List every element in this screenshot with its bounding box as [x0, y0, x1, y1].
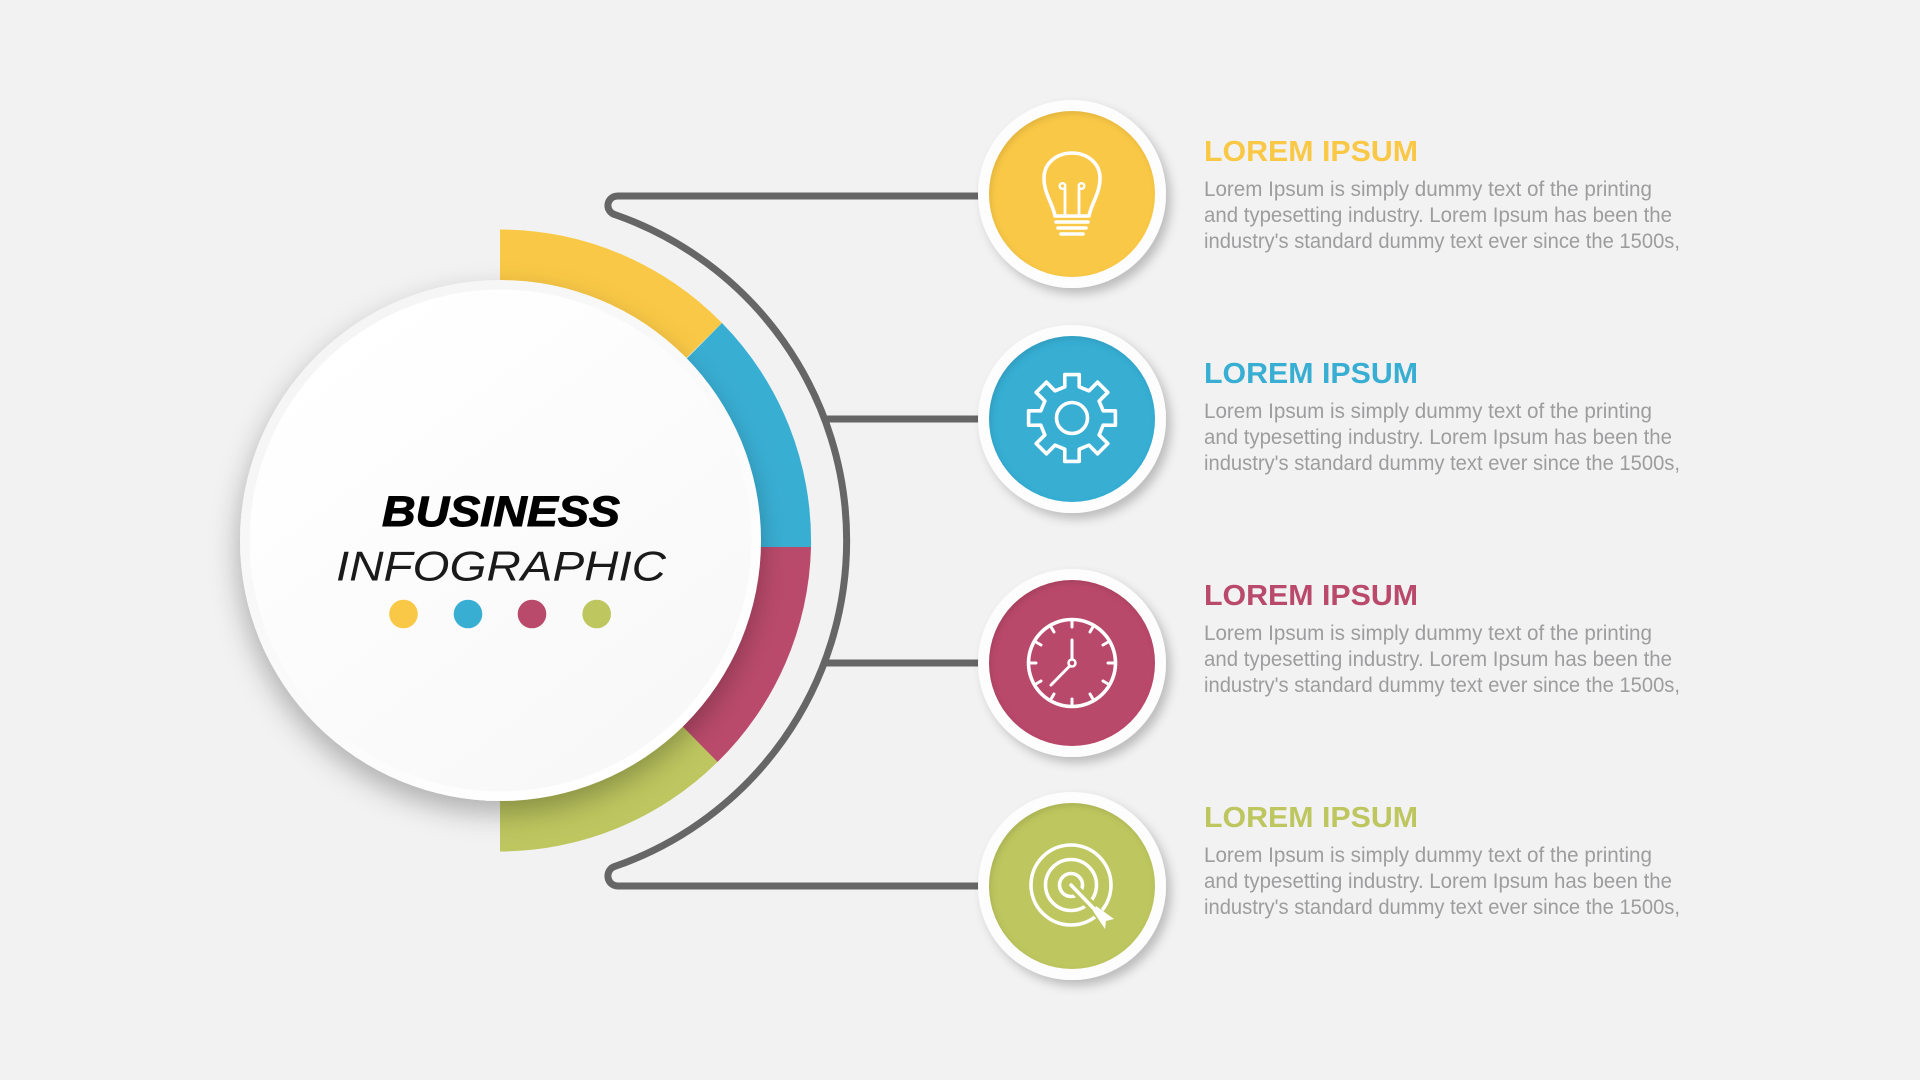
body text: and typesetting industry. Lorem Ipsum has been the	[1204, 204, 1672, 227]
colour dots	[389, 600, 611, 628]
icon: light bulb	[1044, 153, 1100, 234]
icon: gear	[1029, 375, 1115, 461]
node ring	[978, 325, 1166, 513]
body text: Lorem Ipsum is simply dummy text of the printing	[1204, 178, 1652, 201]
body text: industry's standard dummy text ever since the 1500s,	[1204, 896, 1680, 919]
body text: and typesetting industry. Lorem Ipsum has been the	[1204, 870, 1672, 893]
connector bracket lines	[608, 196, 985, 886]
title: infographic: INFOGRAPHIC	[336, 542, 667, 590]
body text: and typesetting industry. Lorem Ipsum has been the	[1204, 426, 1672, 449]
node fill	[989, 580, 1155, 746]
arc segment: yellow	[500, 230, 722, 540]
body text: industry's standard dummy text ever since the 1500s,	[1204, 452, 1680, 475]
body text: and typesetting industry. Lorem Ipsum has been the	[1204, 648, 1672, 671]
segmented colour arc	[500, 230, 811, 852]
body text	[1204, 622, 1680, 697]
step 1: yellow	[978, 100, 1680, 288]
node ring	[978, 792, 1166, 980]
node fill	[989, 336, 1155, 502]
arc segment: blue	[500, 323, 811, 547]
heading: LOREM IPSUM	[1204, 580, 1418, 612]
circle face	[250, 290, 752, 792]
body text	[1204, 178, 1680, 253]
body text: Lorem Ipsum is simply dummy text of the printing	[1204, 622, 1652, 645]
node fill	[989, 803, 1155, 969]
body text: industry's standard dummy text ever since the 1500s,	[1204, 230, 1680, 253]
heading: LOREM IPSUM	[1204, 358, 1418, 390]
step 2: blue	[978, 325, 1680, 513]
node ring	[978, 100, 1166, 288]
title: business: BUSINESS	[382, 488, 620, 536]
step 3: crimson	[978, 569, 1680, 757]
body text: industry's standard dummy text ever since the 1500s,	[1204, 674, 1680, 697]
circle rim	[240, 280, 761, 801]
icon: target	[1031, 845, 1114, 929]
body text	[1204, 844, 1680, 919]
step 4: olive green	[978, 792, 1680, 980]
icon: clock	[1028, 620, 1116, 706]
main circle	[240, 280, 761, 801]
body text	[1204, 400, 1680, 475]
body text: Lorem Ipsum is simply dummy text of the printing	[1204, 400, 1652, 423]
body text: Lorem Ipsum is simply dummy text of the printing	[1204, 844, 1652, 867]
arc segment: crimson	[500, 547, 811, 762]
arc segment: olive green	[500, 540, 718, 852]
heading: LOREM IPSUM	[1204, 802, 1418, 834]
heading: LOREM IPSUM	[1204, 136, 1418, 168]
node ring	[978, 569, 1166, 757]
node fill	[989, 111, 1155, 277]
